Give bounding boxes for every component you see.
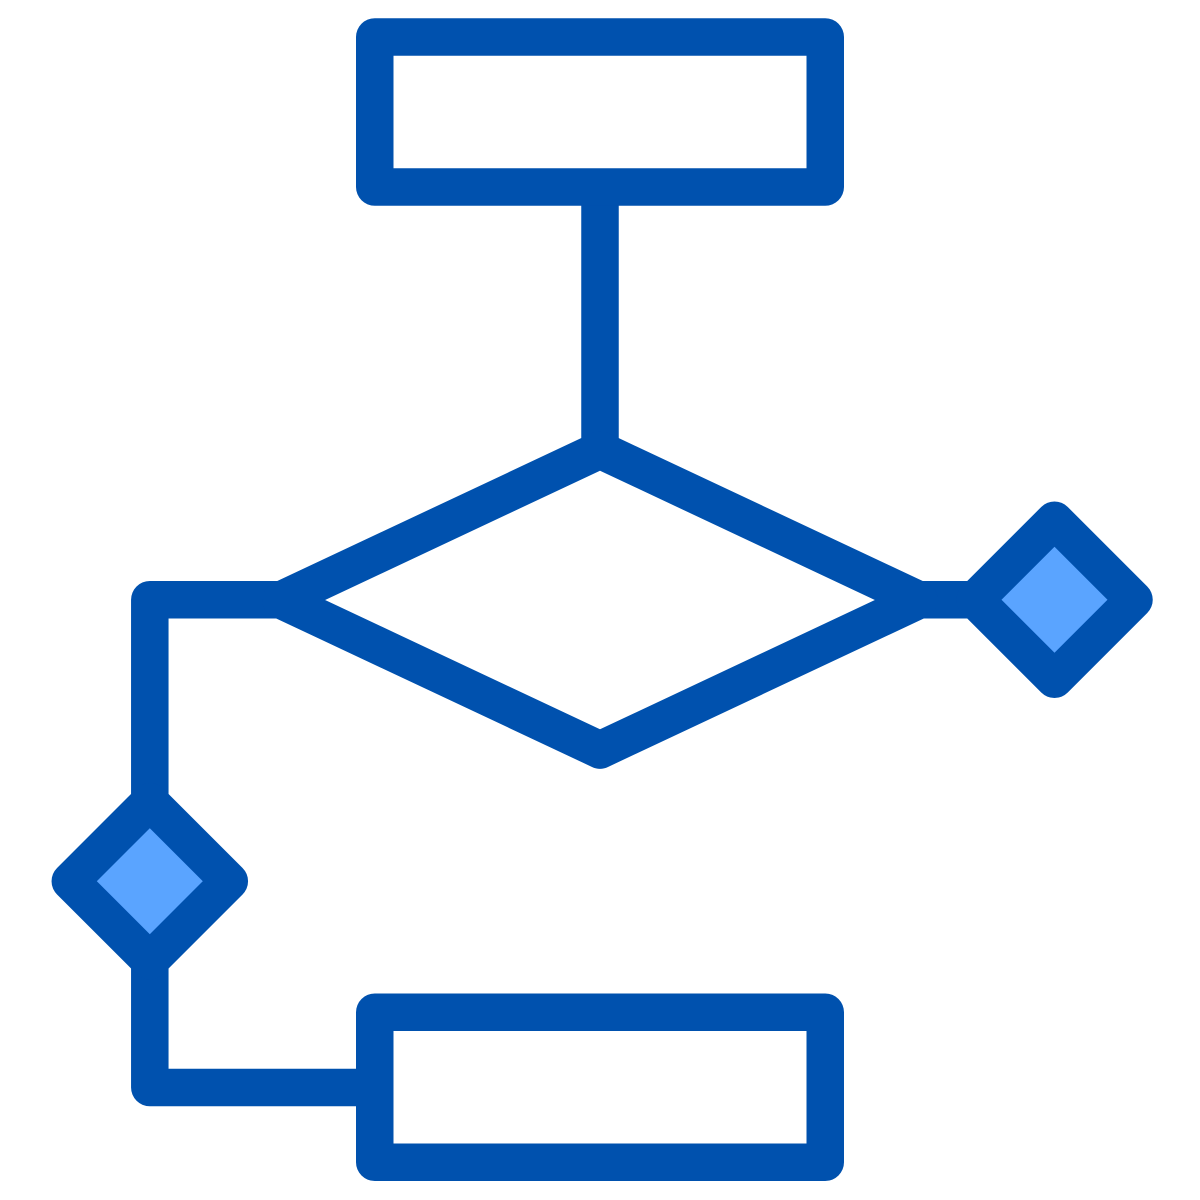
connector: central diamond to right diamond: [900, 581, 985, 618]
top process box: [375, 37, 825, 187]
right decision diamond: [975, 520, 1134, 679]
connector: left diamond to bottom box: [150, 950, 375, 1088]
central decision diamond: [281, 450, 919, 750]
bottom process box: [375, 1012, 825, 1162]
connector: top box to central diamond: [581, 187, 619, 450]
left decision diamond: [70, 802, 229, 961]
connector: central diamond to left diamond: [150, 600, 300, 810]
